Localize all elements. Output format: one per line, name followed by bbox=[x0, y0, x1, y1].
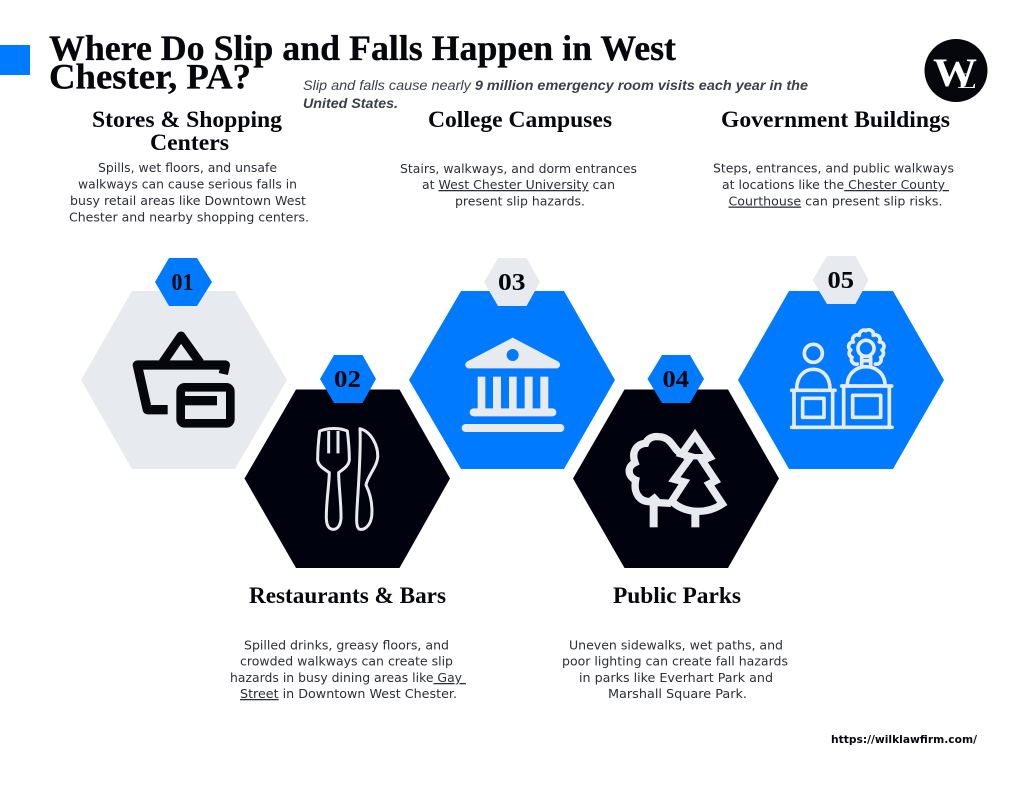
panel: college campuses bbox=[400, 107, 637, 469]
text: restaurants description: Spilled drinks, greasy floors, and bbox=[244, 638, 449, 654]
icon: institution building bbox=[462, 338, 564, 432]
badge 02 bbox=[320, 355, 376, 403]
text: stores description: Chester and nearby shopping centers. bbox=[69, 210, 309, 226]
icon: trees bbox=[629, 435, 722, 527]
subtitle bbox=[303, 77, 808, 111]
accent square bbox=[0, 45, 30, 75]
title: Where Do Slip and Falls Happen in West bbox=[49, 28, 676, 68]
hexagon 02 bbox=[244, 390, 450, 568]
text: government description: Steps, entrances, and public walkways bbox=[713, 162, 954, 176]
logo: W bbox=[933, 50, 977, 95]
logo bbox=[924, 39, 988, 102]
panel: public parks bbox=[562, 355, 788, 702]
text: government description bbox=[713, 162, 954, 210]
heading: stores: Centers bbox=[150, 130, 229, 155]
icon: judge and person bbox=[792, 330, 892, 427]
heading: parks: Public Parks bbox=[613, 583, 741, 608]
badge 05: 05 bbox=[828, 268, 854, 294]
text: stores description: busy retail areas like Downtown West bbox=[70, 194, 306, 209]
heading: government: Government Buildings bbox=[721, 107, 950, 132]
panel: restaurants and bars bbox=[230, 355, 466, 702]
hexagon 03 bbox=[409, 291, 615, 469]
badge 01 bbox=[155, 258, 212, 306]
text: parks description: in parks like Everhart Park and bbox=[579, 671, 773, 686]
logo: L bbox=[957, 68, 977, 93]
heading: stores bbox=[92, 107, 283, 155]
badge 03: 03 bbox=[498, 270, 526, 296]
text: restaurants description: hazards in busy dining areas like Gay bbox=[230, 671, 466, 686]
text: college description: Stairs, walkways, and dorm entrances bbox=[400, 162, 637, 177]
text: stores description: walkways can cause serious falls in bbox=[78, 178, 297, 192]
text: college description: present slip hazards. bbox=[455, 194, 585, 210]
hexagon 04 bbox=[573, 390, 779, 568]
subtitle: United States. bbox=[303, 95, 398, 111]
title: Chester, PA? bbox=[49, 56, 251, 96]
text: college description bbox=[400, 162, 637, 210]
hexagon 01 bbox=[81, 291, 287, 469]
icon: fork and knife bbox=[318, 428, 378, 529]
title bbox=[49, 28, 676, 96]
text: restaurants description: crowded walkways can create slip bbox=[240, 654, 453, 670]
heading: stores: Stores & Shopping bbox=[92, 107, 283, 132]
text: stores description: Spills, wet floors, and unsafe bbox=[98, 161, 277, 176]
badge 03 bbox=[484, 258, 540, 306]
badge 05 bbox=[812, 256, 868, 304]
badge 02: 02 bbox=[334, 367, 361, 393]
panel: stores and shopping centers bbox=[69, 107, 309, 469]
text: parks description: poor lighting can create fall hazards bbox=[562, 654, 788, 670]
subtitle: Slip and falls cause nearly 9 million emergency room visits each year in the bbox=[303, 77, 808, 93]
text: parks description bbox=[562, 638, 788, 702]
badge 04 bbox=[648, 355, 704, 403]
heading: college: College Campuses bbox=[428, 107, 612, 132]
website url: https://wilklawfirm.com/ bbox=[831, 733, 978, 746]
panel: government buildings bbox=[713, 107, 954, 469]
hexagon 05 bbox=[738, 291, 944, 469]
text: government description: at locations like the Chester County bbox=[722, 178, 949, 193]
text: restaurants description bbox=[230, 638, 466, 702]
heading: restaurants: Restaurants & Bars bbox=[249, 583, 446, 608]
text: parks description: Uneven sidewalks, wet paths, and bbox=[569, 638, 783, 654]
text: college description: at West Chester University can bbox=[422, 178, 615, 193]
icon: shopping basket bbox=[137, 336, 230, 423]
badge 04: 04 bbox=[662, 367, 689, 393]
text: restaurants description: Street in Downtown West Chester. bbox=[240, 687, 457, 702]
badge 01: 01 bbox=[172, 270, 194, 296]
text: parks description: Marshall Square Park. bbox=[608, 687, 747, 702]
text: stores description bbox=[69, 161, 309, 226]
text: government description: Courthouse can present slip risks. bbox=[728, 194, 942, 210]
